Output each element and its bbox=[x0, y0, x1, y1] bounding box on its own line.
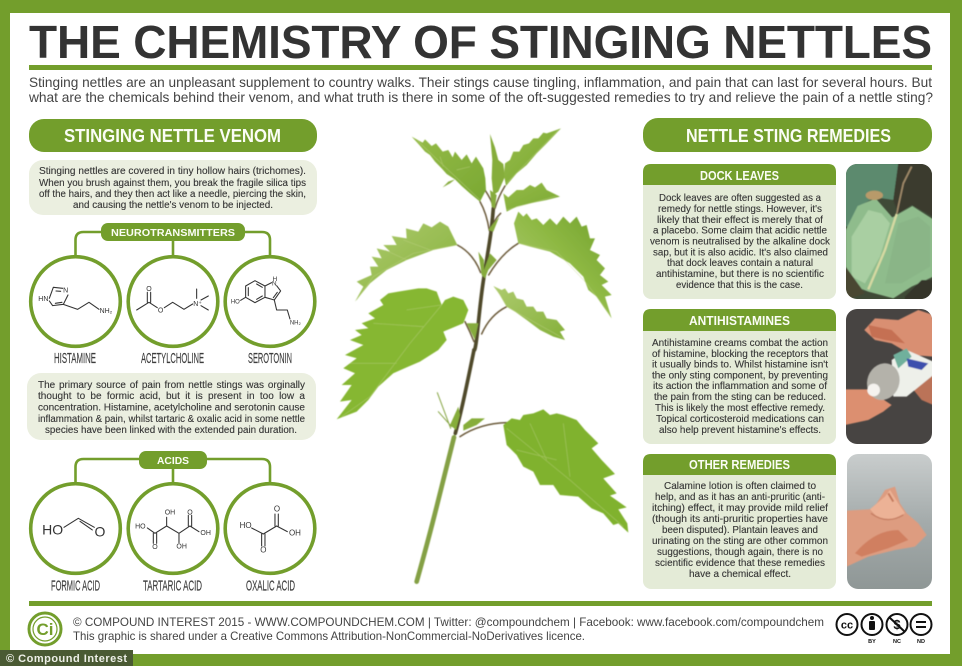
heading: stinging nettle venom: STINGING NETTLE VENOM bbox=[64, 125, 281, 146]
leaf: lower right narrow bbox=[493, 286, 565, 340]
card: dock leaves: a placebo. Some claim that acidic nettle bbox=[653, 226, 827, 236]
card: other remedies: suggestions, though again, there is no bbox=[657, 547, 823, 558]
molecule: acetylcholine bbox=[128, 257, 218, 367]
card: other remedies: OTHER REMEDIES bbox=[689, 457, 790, 472]
card: antihistamines: Topical corticosteroid medications can bbox=[656, 414, 824, 425]
molecule: formic acid: FORMIC ACID bbox=[51, 578, 100, 594]
card: other remedies: been disputed). Plantain leaves and bbox=[662, 525, 818, 536]
creative commons icons: cc bbox=[841, 620, 853, 632]
molecule: acetylcholine: ACETYLCHOLINE bbox=[141, 351, 204, 367]
card: other remedies: scientific evidence that these remedies bbox=[655, 558, 825, 569]
molecule: oxalic acid: O bbox=[260, 546, 266, 555]
nettle plant illustration bbox=[337, 128, 628, 582]
photo: skin bump bbox=[847, 454, 932, 589]
credits text bbox=[73, 615, 824, 643]
card: other remedies bbox=[643, 454, 836, 589]
leaf: large right bbox=[514, 212, 612, 318]
text block: source of pain: The primary source of pain from nettle stings was orginally bbox=[38, 380, 305, 391]
card: dock leaves: sap, but it is also acidic. It's also claimed bbox=[653, 248, 828, 258]
card: dock leaves: remedy for nettle stings. However, it's bbox=[658, 204, 822, 215]
molecule: serotonin bbox=[225, 257, 315, 367]
molecule: acetylcholine: O bbox=[146, 286, 152, 293]
molecule: histamine: N bbox=[63, 288, 68, 295]
card: dock leaves: Dock leaves are often suggested as a bbox=[659, 193, 821, 204]
card: other remedies: urinating on the sting are other common bbox=[652, 536, 828, 547]
card: antihistamines: the pain from the sting can be reduced. bbox=[654, 392, 826, 403]
molecule: formic acid: O bbox=[95, 524, 106, 540]
molecule: tartaric acid: OH bbox=[176, 544, 187, 551]
card: dock leaves: that dock leaves contain a natural bbox=[667, 258, 813, 269]
molecule: oxalic acid: O bbox=[274, 505, 280, 514]
neurotransmitters connector and heading bbox=[76, 223, 270, 256]
card: other remedies: itching) effect, it may provide mild relief bbox=[652, 503, 828, 514]
creative commons icons: $ bbox=[893, 617, 901, 632]
footer bbox=[29, 601, 932, 645]
leaf: top left bbox=[412, 137, 486, 202]
card: dock leaves: DOCK LEAVES bbox=[700, 168, 779, 183]
watermark: © Compound Interest bbox=[6, 653, 127, 665]
intro text: Stinging nettles are an unpleasant supplement to country walks. Their stings cause tingling, inflammation, and pain that can last for several hours. But bbox=[29, 75, 932, 90]
molecule: tartaric acid bbox=[128, 484, 218, 594]
watermark bbox=[0, 650, 133, 666]
molecule: serotonin: HO bbox=[231, 299, 240, 305]
card: antihistamines: it usually binds to. Whilst histamine isn't bbox=[652, 360, 828, 370]
card: other remedies: help, and as it has an anti-pruritic (anti- bbox=[655, 492, 825, 503]
molecule: tartaric acid: O bbox=[152, 544, 158, 551]
molecule: tartaric acid: OH bbox=[165, 510, 175, 517]
molecule: formic acid: HO bbox=[42, 522, 63, 538]
molecule: tartaric acid: HO bbox=[135, 523, 146, 530]
molecule: histamine: HISTAMINE bbox=[54, 351, 96, 367]
card: dock leaves: antihistamine, but there is no scientific bbox=[656, 269, 824, 280]
molecule: serotonin: NH₂ bbox=[290, 320, 301, 326]
panel: stinging nettle venom bbox=[27, 119, 317, 594]
card: antihistamines: Antihistamine creams combat the action bbox=[652, 338, 828, 349]
text block: source of pain: concentration. Histamine, acetylcholine and serotonin cause bbox=[38, 402, 306, 414]
card: antihistamines: ANTIHISTAMINES bbox=[689, 313, 790, 328]
panel: nettle sting remedies bbox=[643, 118, 933, 589]
text block: trichomes: When you brush against them, you break the fragile silica tips bbox=[39, 178, 306, 189]
creative commons icons bbox=[836, 614, 932, 645]
logo: compound interest bbox=[29, 613, 61, 645]
photo: cream tube bbox=[845, 309, 933, 444]
card: dock leaves bbox=[643, 164, 836, 299]
creative commons icons: ND bbox=[917, 639, 925, 645]
card: dock leaves: evidence that this is the case. bbox=[676, 280, 803, 291]
molecule: oxalic acid: OXALIC ACID bbox=[246, 578, 295, 594]
creative commons icons: BY bbox=[868, 639, 876, 645]
lower half of plant bbox=[417, 350, 628, 582]
text block: source of pain: inflammation & pain, whilst tartaric & oxalic acid in some nettle bbox=[38, 414, 306, 425]
card: antihistamines: also help prevent histamine's effects. bbox=[659, 425, 821, 436]
molecule: histamine: NH₂ bbox=[100, 308, 113, 315]
molecule: tartaric acid: OH bbox=[200, 530, 211, 537]
title: THE CHEMISTRY OF STINGING NETTLES bbox=[29, 16, 932, 68]
leaf: small right bbox=[503, 183, 560, 212]
card: antihistamines bbox=[643, 309, 836, 444]
creative commons icons: NC bbox=[893, 639, 901, 645]
leaf: top right bbox=[504, 128, 561, 186]
leaflets at node bbox=[450, 407, 485, 431]
text block: source of pain: species have been linked with the extended pain duration. bbox=[45, 425, 297, 436]
card: antihistamines: of histamine, blocking the receptors that bbox=[652, 349, 828, 360]
molecule: tartaric acid: O bbox=[187, 509, 193, 516]
neurotransmitters connector and heading: NEUROTRANSMITTERS bbox=[111, 227, 235, 239]
intro text: what are the chemicals behind their venom, and what truth is there in some of the oft-suggested remedies to try and relieve the pain of a nettle sting? bbox=[28, 90, 933, 105]
leaf: middle left bbox=[355, 222, 457, 302]
upper half of plant bbox=[337, 128, 612, 419]
credits text: © COMPOUND INTEREST 2015 - WWW.COMPOUNDCHEM.COM | Twitter: @compoundchem | Facebook: www.facebook.com/compoundchem bbox=[73, 615, 824, 629]
text block: trichomes bbox=[29, 160, 317, 215]
leaf: lower right large bbox=[503, 409, 628, 533]
text block: source of pain: thought to be formic acid, but it is present in too low a bbox=[38, 391, 306, 402]
card: other remedies: (though its anti-pruritic properties have bbox=[652, 514, 828, 525]
acids connector and heading bbox=[76, 451, 270, 483]
leaf: large lower left bbox=[337, 288, 468, 419]
acids connector and heading: ACIDS bbox=[157, 455, 189, 467]
logo: compound interest: Ci bbox=[36, 620, 54, 639]
text block: trichomes: Stinging nettles are covered in tiny hollow hairs (trichomes). bbox=[39, 166, 306, 177]
molecule: oxalic acid: OH bbox=[289, 528, 301, 537]
card: antihistamines: its action the inflammation and some of bbox=[653, 381, 827, 392]
card: antihistamines: This is likely the most effective remedy. bbox=[655, 403, 825, 414]
text block: trichomes: and causing the nettle's venom to be injected. bbox=[73, 200, 273, 211]
card: other remedies: Calamine lotion is often claimed to bbox=[664, 481, 816, 492]
text block: source of pain bbox=[27, 373, 316, 440]
credits text: This graphic is shared under a Creative Commons Attribution-NonCommercial-NoDerivatives licence. bbox=[73, 629, 585, 643]
heading: stinging nettle venom bbox=[29, 119, 317, 152]
molecule: oxalic acid bbox=[225, 484, 315, 594]
text block: trichomes: off the hairs, and they then act like a needle, piercing the skin, bbox=[39, 189, 306, 200]
card: dock leaves: venom is neutralised by the alkaline dock bbox=[650, 236, 831, 248]
molecule: acetylcholine: O bbox=[158, 307, 164, 314]
heading: nettle sting remedies: NETTLE STING REMEDIES bbox=[686, 125, 891, 146]
molecule: serotonin: SEROTONIN bbox=[248, 351, 292, 367]
molecule: acetylcholine: N⁺ bbox=[193, 301, 202, 308]
molecule: histamine: HN bbox=[38, 296, 48, 303]
molecule: histamine bbox=[31, 257, 120, 367]
card: dock leaves: likely that their effect is merely that of bbox=[657, 215, 823, 226]
molecule: oxalic acid: HO bbox=[240, 521, 252, 530]
molecule: tartaric acid: TARTARIC ACID bbox=[143, 578, 202, 594]
heading: nettle sting remedies bbox=[643, 118, 932, 152]
molecule: serotonin: N bbox=[272, 281, 277, 288]
molecule: formic acid bbox=[31, 484, 120, 594]
photo: dock leaf bbox=[845, 163, 933, 300]
card: other remedies: have a chemical effect. bbox=[689, 569, 791, 580]
leaf: top narrow bbox=[490, 134, 505, 195]
card: antihistamines: the only sting component, by preventing bbox=[652, 370, 828, 382]
molecule: serotonin: H bbox=[273, 276, 278, 283]
intro text bbox=[28, 75, 933, 105]
